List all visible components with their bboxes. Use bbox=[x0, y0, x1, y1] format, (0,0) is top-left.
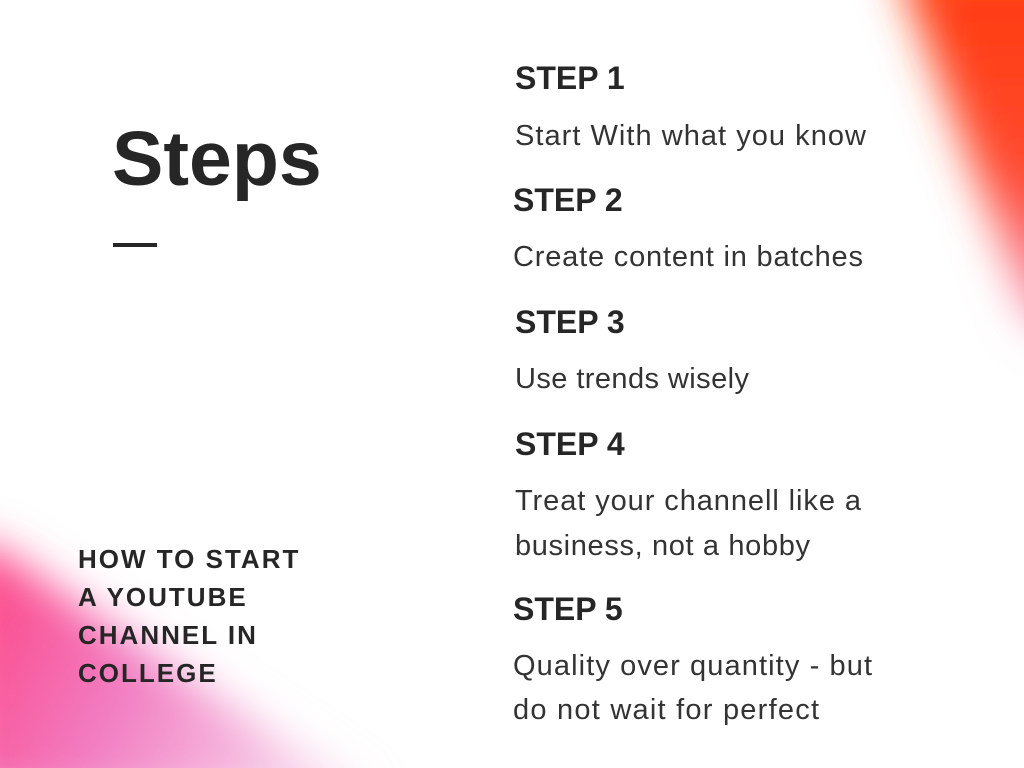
step 5: STEP 5 bbox=[513, 591, 623, 627]
subtitle: COLLEGE bbox=[78, 658, 218, 688]
decoration: top-right gradient bbox=[895, 0, 1024, 340]
step list bbox=[513, 60, 872, 726]
step 4 bbox=[515, 426, 862, 562]
subtitle bbox=[78, 544, 300, 688]
step 1 bbox=[515, 60, 867, 152]
step 5 bbox=[513, 591, 872, 726]
step 1: STEP 1 bbox=[515, 60, 625, 96]
step 1: Start With what you know bbox=[515, 120, 867, 152]
step 4: Treat your channell like a bbox=[515, 485, 862, 517]
step 5: Quality over quantity - but bbox=[513, 650, 872, 682]
step 5: do not wait for perfect bbox=[513, 694, 819, 726]
step 3 bbox=[515, 304, 750, 395]
subtitle: CHANNEL IN bbox=[78, 620, 258, 650]
subtitle: HOW TO START bbox=[78, 544, 300, 574]
step 2: Create content in batches bbox=[513, 241, 863, 273]
subtitle: A YOUTUBE bbox=[78, 582, 248, 612]
decoration: bottom-left gradient bbox=[0, 540, 370, 768]
step 2 bbox=[513, 182, 863, 273]
step 4: business, not a hobby bbox=[515, 530, 810, 562]
step 2: STEP 2 bbox=[513, 182, 623, 218]
step 3: Use trends wisely bbox=[515, 363, 750, 395]
step 3: STEP 3 bbox=[515, 304, 625, 340]
title: Steps bbox=[112, 116, 322, 202]
title underline dash bbox=[113, 243, 157, 247]
step 4: STEP 4 bbox=[515, 426, 625, 462]
